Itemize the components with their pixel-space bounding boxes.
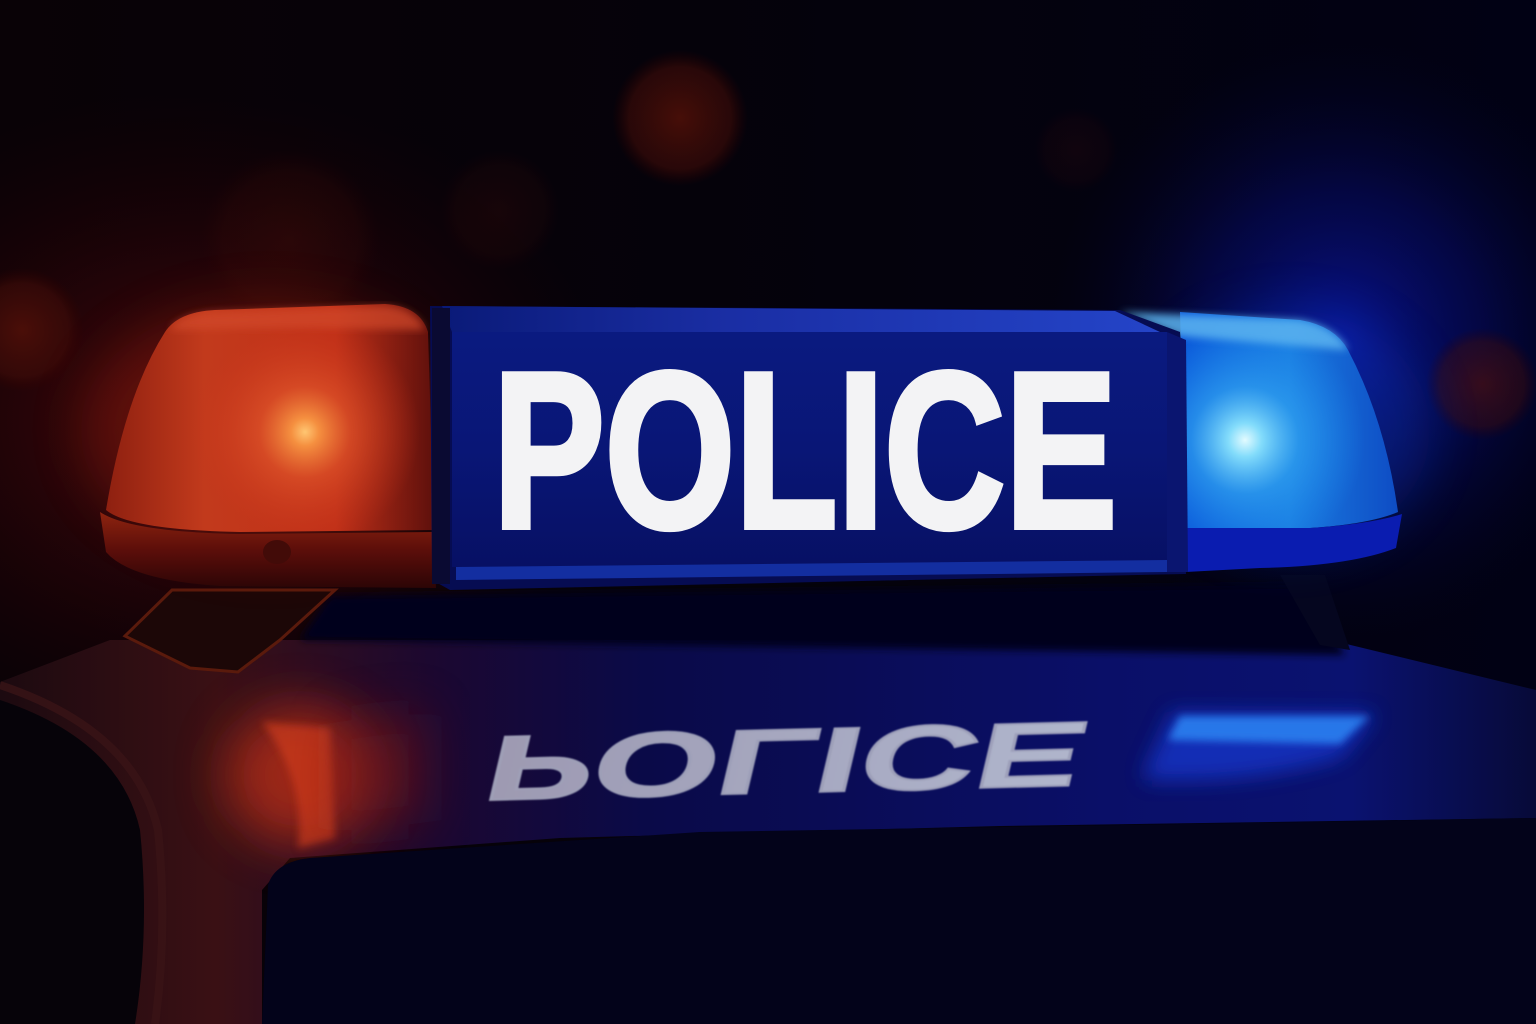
windshield dark area [262,818,1536,1024]
POLICE lettering: POLICE [493,327,1117,575]
red lamp base [100,512,436,588]
blue lamp base [1186,514,1402,572]
red roof glow [225,705,375,845]
mount: blue side bracket [1280,575,1350,650]
mount: red side bracket [125,590,335,672]
red lamp glow [80,300,460,560]
light bar shadow on roof [300,585,1345,655]
side window [0,700,144,1024]
car roof [0,585,1536,1024]
POLICE reflection on roof: POLICE [476,702,1097,820]
blue lamp [1120,312,1402,572]
light bar centre panel [430,306,1188,590]
blue lamp glow [1150,310,1430,550]
blue reflection of lamp on roof [1145,712,1376,781]
red lamp [100,304,436,588]
